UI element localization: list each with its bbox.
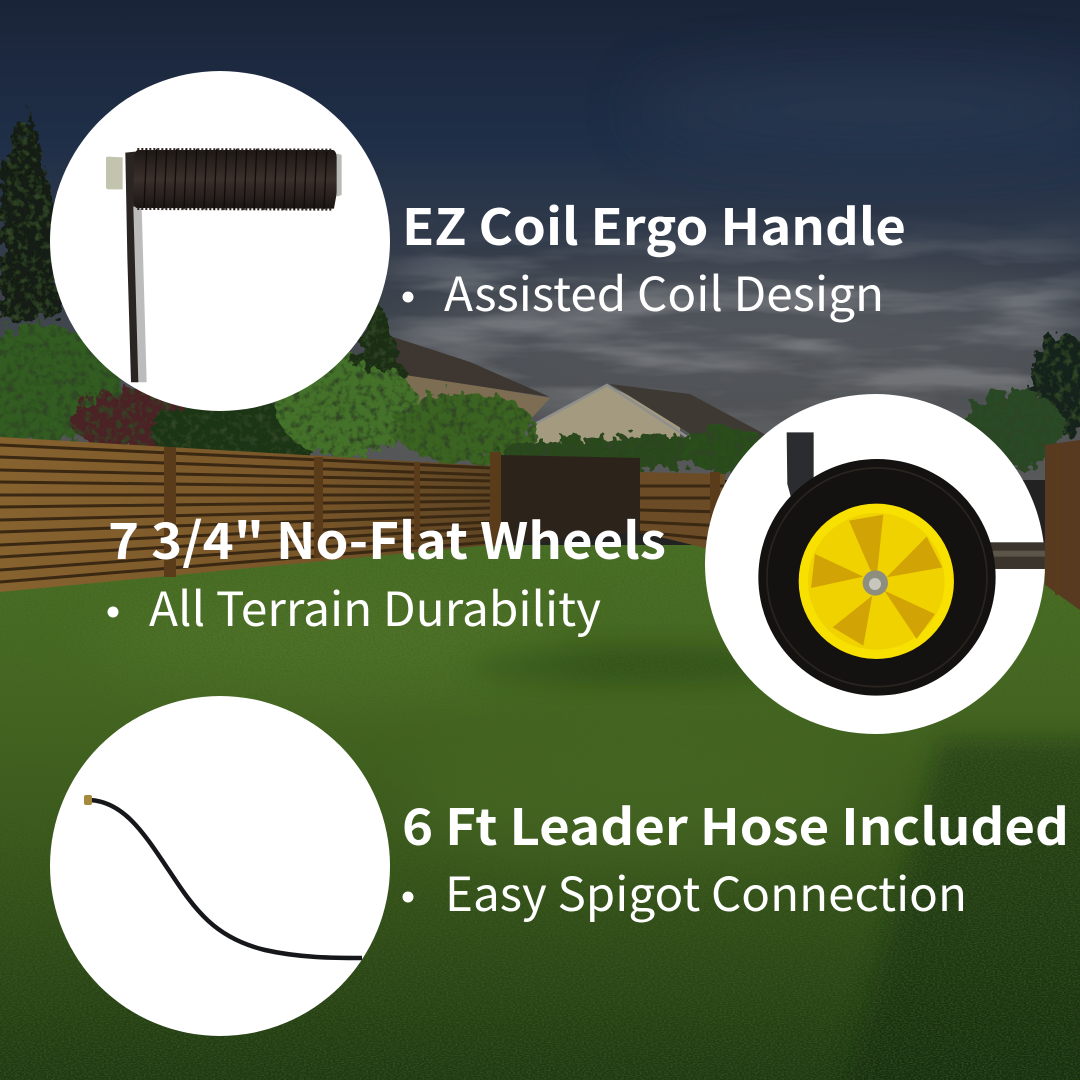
house right [535,384,768,450]
white circle [50,696,390,1036]
feature 1 text [402,188,906,325]
icon: ergonomic coil handle [106,149,342,382]
heading: 7 3/4" No-Flat Wheels: 7 3/4" No-Flat Wheels [108,502,666,574]
hedges and shrubs [0,295,1080,472]
feature 2 text [108,502,666,640]
heading: 6 Ft Leader Hose Included: 6 Ft Leader Hose Included [402,788,1069,860]
lawn [0,545,1080,1080]
house left [385,336,550,420]
white circle [705,394,1045,734]
white circle [50,71,390,411]
sky [0,0,1080,480]
bullet: Easy Spigot Connection: Easy Spigot Connection [445,856,967,925]
heading: EZ Coil Ergo Handle: EZ Coil Ergo Handle [402,188,906,260]
feature 3 text [402,788,1069,925]
icon: yellow no-flat wheel [758,432,1045,696]
panel: wheel photo circle [705,394,1045,734]
clouds [400,70,1080,420]
left conifer [0,108,58,320]
wooden fence [0,437,1080,610]
lawn shadows and mowing stripes [0,545,1080,1080]
panel: handle photo circle [50,71,390,411]
panel: leader hose photo circle [50,696,390,1036]
bullet: Assisted Coil Design: Assisted Coil Design [444,256,884,325]
icon: leader hose [84,795,362,958]
bullet: All Terrain Durability: All Terrain Durability [149,571,601,640]
